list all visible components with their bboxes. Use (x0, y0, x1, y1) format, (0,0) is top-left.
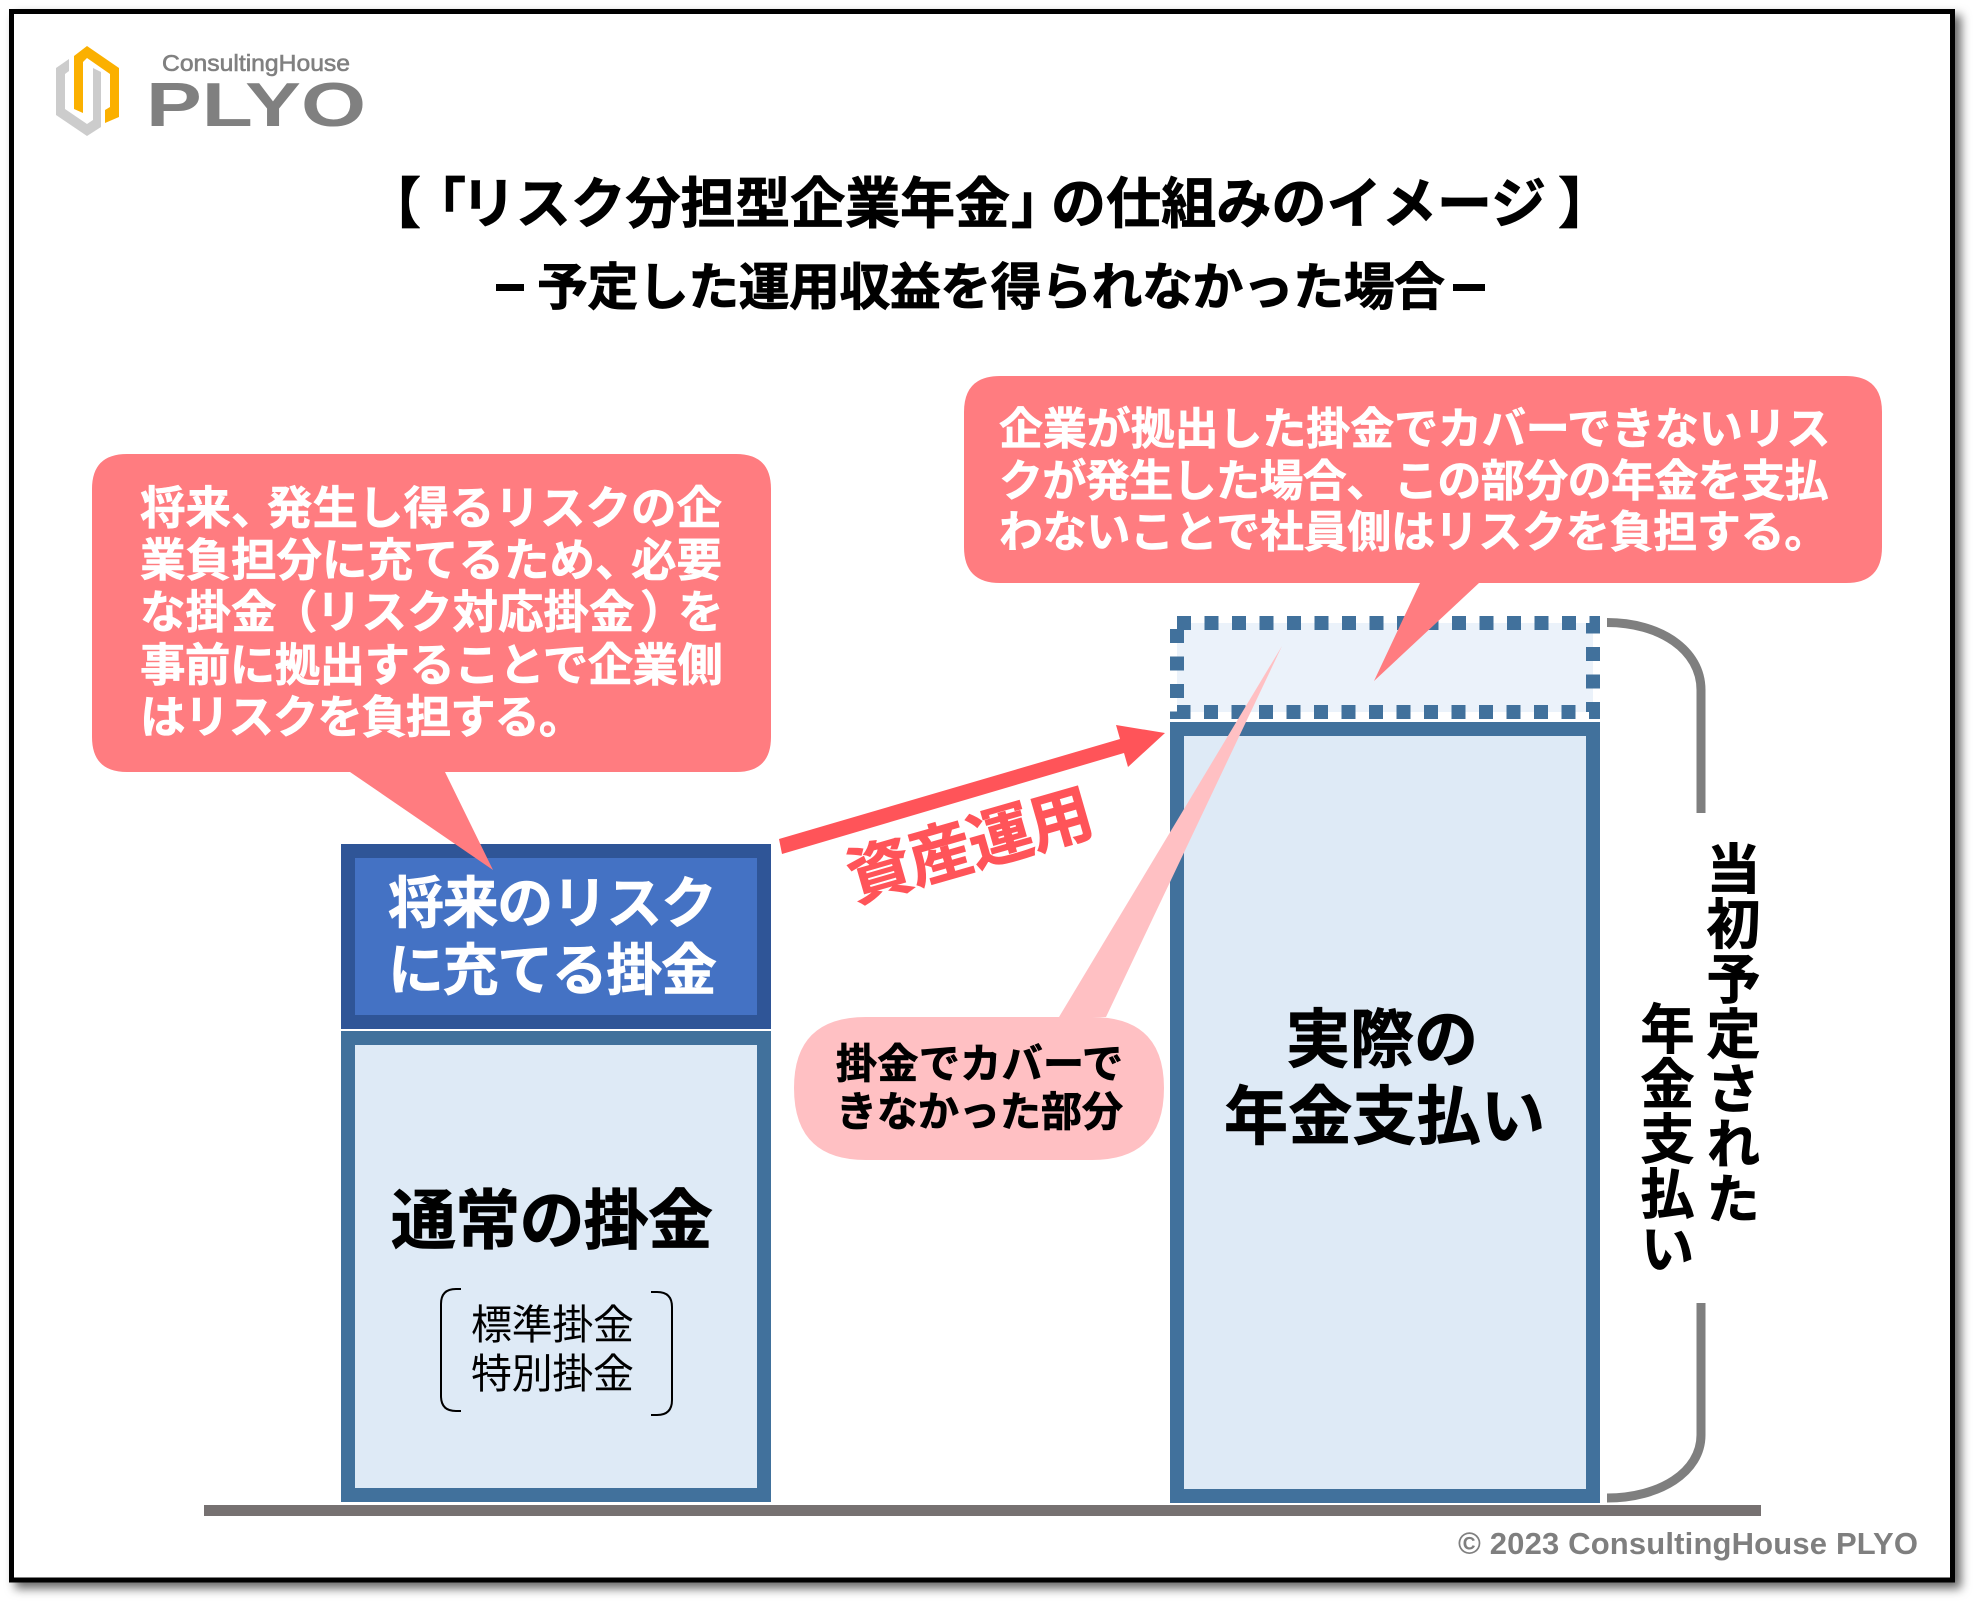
callout: left risk explanation: （ (272, 587, 318, 638)
panel: normal contribution box (348, 1038, 764, 1495)
callout: shortfall portion (794, 646, 1282, 1160)
callout: right risk explanation: わないことで社員側はリスクを負担する。 (999, 508, 1828, 557)
callout: left risk explanation: を (678, 587, 724, 638)
logo text: ConsultingHouse: ConsultingHouse (162, 50, 350, 76)
callout: left risk explanation: な掛金 (140, 587, 277, 638)
callout: shortfall portion: きなかった部分 (836, 1089, 1123, 1135)
bracket list: 標準掛金 特別掛金 (441, 1289, 672, 1415)
label: 将来のリスクに充てる掛金 (388, 872, 717, 1002)
label: 当初予定された年金支払い vertical: 当初予定された (1698, 841, 1760, 1226)
callout: left risk explanation: 将来、 (140, 483, 277, 534)
label: 実際の年金支払い: 実際の (1286, 1004, 1478, 1076)
label: 将来のリスクに充てる掛金: 将来のリスク (388, 872, 717, 935)
bracket list: 標準掛金 特別掛金: 標準掛金 (471, 1302, 634, 1348)
callout: right risk explanation: クが発生した場合、 (999, 457, 1390, 506)
label: 実際の年金支払い (1224, 1004, 1545, 1153)
baseline axis (204, 1505, 1761, 1516)
callout: right risk explanation: この部分の年金を支払 (1394, 457, 1829, 506)
panel: risk contribution box (348, 851, 764, 1022)
icon: hexagon mark (56, 46, 119, 136)
callout: right risk explanation: 企業が拠出した掛金でカバーできないリス (999, 405, 1830, 454)
bracket list: 標準掛金 特別掛金: 特別掛金 (471, 1351, 634, 1397)
label: 将来のリスクに充てる掛金: に充てる掛金 (388, 939, 717, 1002)
panel: unpaid portion dashed box (1177, 623, 1593, 712)
title (366, 173, 1613, 235)
copyright: © 2023 ConsultingHouse PLYO (1458, 1526, 1918, 1561)
label: 資産運用: 資産運用 (839, 777, 1101, 915)
callout: shortfall portion: 掛金でカバーで (836, 1041, 1123, 1087)
callout: left risk explanation: ） (640, 587, 686, 638)
logo text: PLYO: PLYO (146, 71, 366, 140)
callout: left risk explanation: 事前に拠出することで企業側 (140, 640, 722, 691)
logo (56, 46, 366, 140)
label: 当初予定された年金支払い vertical: 年金支払い (1632, 1001, 1693, 1276)
panel: actual pension payment box (1177, 729, 1593, 1496)
callout: left risk explanation: はリスクを負担する。 (140, 692, 583, 743)
callout: left risk explanation: 発生し得るリスクの企 (267, 483, 722, 534)
label: 実際の年金支払い: 年金支払い (1224, 1081, 1545, 1153)
title: 】 (1558, 173, 1613, 235)
callout: left risk explanation: リスク対応掛金 (316, 587, 635, 638)
title: の仕組みのイメージ (1051, 173, 1546, 235)
title: 「 (411, 173, 466, 235)
title: 【 (366, 173, 421, 235)
callout: left risk explanation: 業負担分に充てるため、 (140, 535, 641, 586)
arrow: investment (779, 725, 1165, 854)
title: 」 (1011, 173, 1066, 235)
bracket: planned total (1607, 622, 1701, 1498)
callout: left risk explanation: 必要 (631, 535, 722, 586)
title: リスク分担型企業年金 (461, 173, 1010, 235)
callout: left risk explanation (92, 454, 771, 870)
label: 通常の掛金: 通常の掛金 (391, 1184, 713, 1257)
callout: right risk explanation (964, 376, 1882, 681)
label: 当初予定された年金支払い vertical (1632, 841, 1760, 1276)
subtitle: 予定した運用収益を得られなかった場合 (537, 259, 1445, 316)
